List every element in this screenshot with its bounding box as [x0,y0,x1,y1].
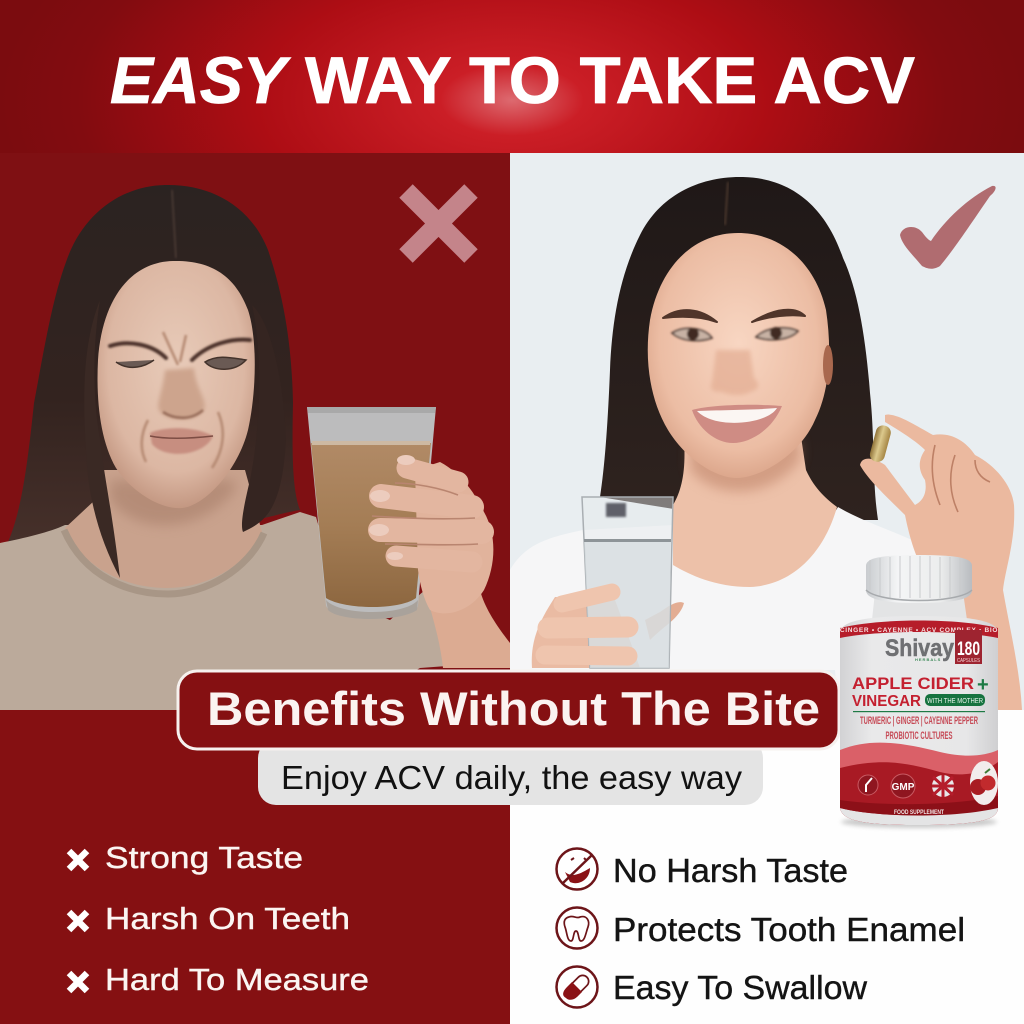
hand holding glass [369,455,493,613]
icon: check mark [900,186,996,269]
capsule count badge: CAPSULES [957,658,981,664]
list: benefits [556,848,965,1008]
top label band: CINGER • CAYENNE • ACV COMPLEX • BIO [840,627,998,634]
eyes [116,357,246,369]
header banner [0,0,1024,153]
mouth [150,428,213,454]
nose [158,368,205,419]
bottle neck [872,592,967,620]
shirt [0,512,447,710]
product name: APPLE CIDER [852,674,974,693]
ingredient text: PROBIOTIC CULTURES [886,730,952,742]
capsule [868,424,892,463]
item: harsh on teeth: Harsh On Teeth [105,901,350,936]
bottle cap [866,555,972,603]
shirt collar [64,530,264,594]
certification badges: GMP [892,782,915,793]
subtitle text: Enjoy ACV daily, the easy way [281,759,743,796]
headline text: Benefits Without The Bite [207,682,820,735]
headline banner [178,671,839,749]
hand holding capsule [860,415,1022,710]
product name [852,674,989,712]
product name: + [977,674,989,696]
smile [692,405,782,443]
certification badges [858,774,954,798]
nose [711,350,758,395]
brows [663,310,805,322]
item: easy to swallow: Easy To Swallow [613,969,867,1006]
frown wrinkles [142,332,223,468]
capsule count badge: 180 [957,639,980,660]
icon: cross mark [406,191,471,256]
product name: WITH THE MOTHER [927,696,983,705]
neck [673,430,837,587]
hair back [8,185,300,542]
apple graphic [970,761,998,805]
item: no harsh taste: No Harsh Taste [613,852,848,889]
brand name: HERBALS [915,657,941,662]
glass [307,407,436,619]
ear [823,345,833,385]
face [648,233,829,478]
fingers around glass [545,592,628,656]
neck [65,470,262,588]
title: EASY [110,43,291,117]
fingernails [369,455,415,560]
title: WAY TO TAKE ACV [305,43,915,117]
item: hard to measure: Hard To Measure [105,962,369,997]
photo: smiling woman with capsule and water [510,177,1022,710]
top label band [840,620,998,638]
parting [725,182,728,225]
capsule count badge [955,630,982,664]
photo: grimacing woman with glass of vinegar [0,185,510,710]
eyes [672,327,798,341]
lower label waves [840,743,998,825]
brand name: Shivay [885,635,955,662]
right panel background [510,153,1024,1024]
bottle body [840,616,998,825]
ingredient text [860,715,978,742]
product bottle [840,555,998,828]
glass of water [582,497,673,668]
hair back [600,177,878,520]
face [98,261,255,508]
hair framing face [84,300,120,578]
food supplement text: FOOD SUPPLEMENT [894,809,944,816]
list: drawbacks [69,840,369,997]
item: strong taste: Strong Taste [105,840,303,875]
item: protects tooth enamel: Protects Tooth Enamel [613,911,965,948]
left panel background [0,150,510,1024]
hand holding water glass [532,597,684,668]
shirt [510,507,1010,710]
forearm [425,590,510,668]
bottle shadow [841,816,997,828]
brows [110,340,250,360]
product name: VINEGAR [852,693,921,710]
subtitle strip [258,740,763,805]
